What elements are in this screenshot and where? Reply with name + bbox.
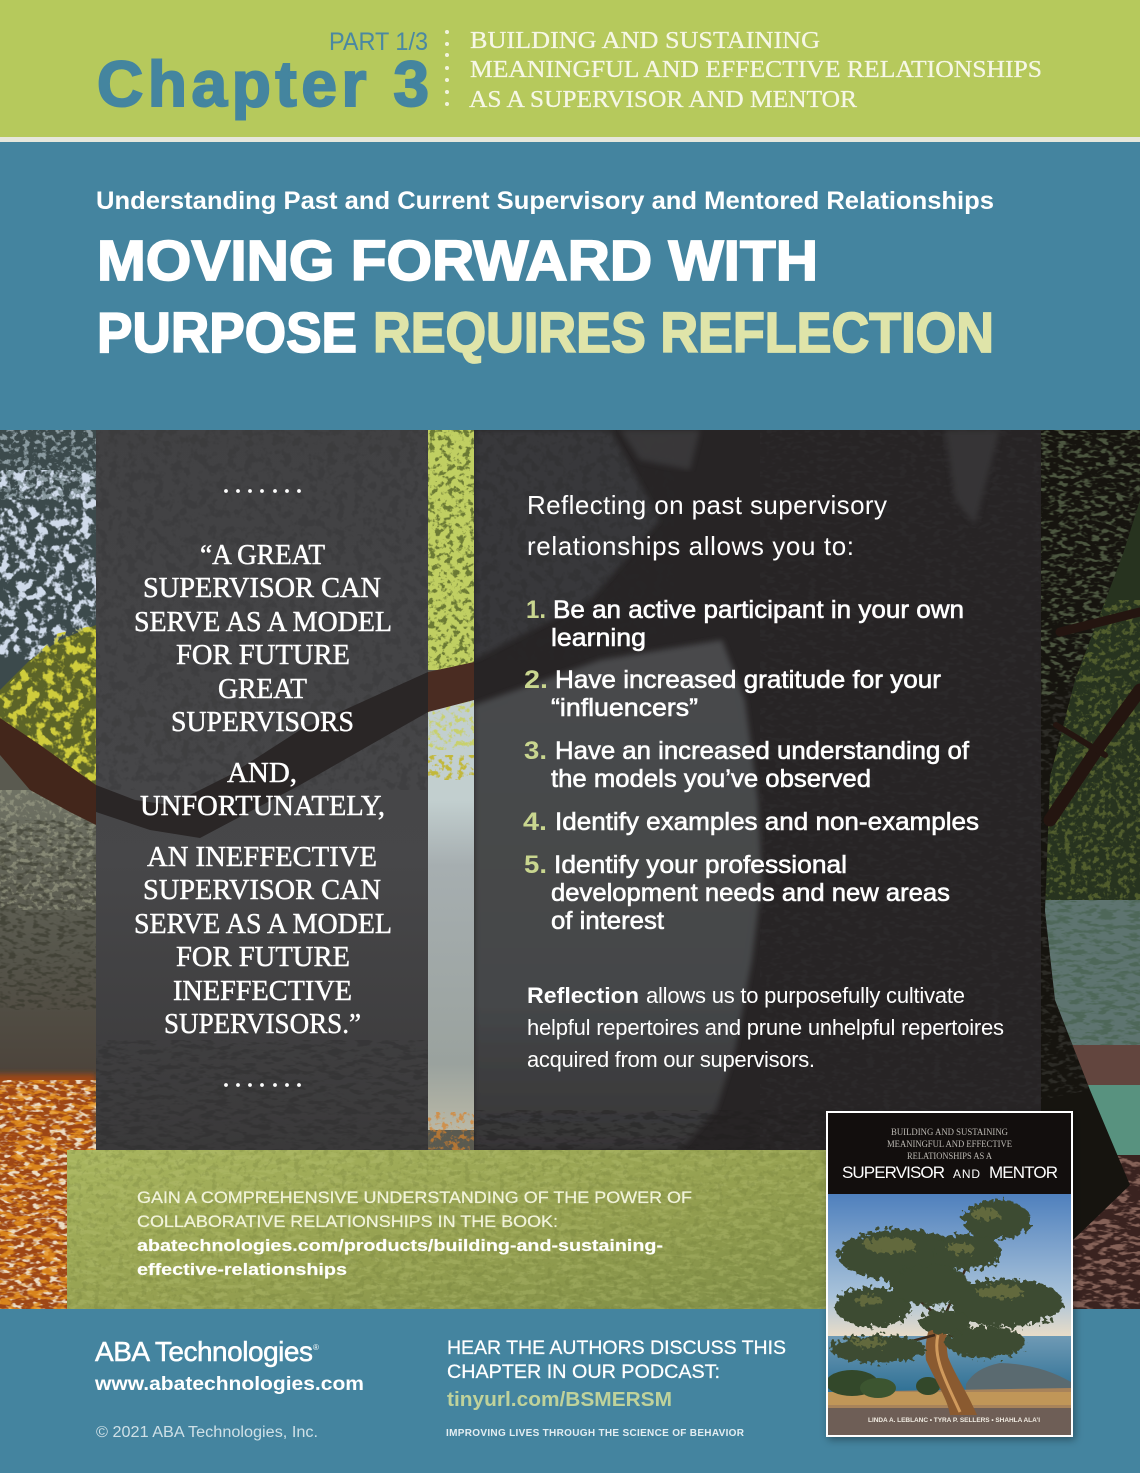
item 5: development needs and new areas <box>551 879 950 907</box>
main heading line 1: MOVING FORWARD WITH <box>97 229 818 293</box>
item 1: Be an active participant in your own <box>553 596 964 624</box>
item 3: 3. <box>524 737 547 765</box>
panel: title block <box>0 142 1140 430</box>
intro text <box>527 490 887 561</box>
right forest branches <box>1050 612 1140 820</box>
book title in header: AS A SUPERVISOR AND MENTOR <box>469 87 857 113</box>
quote text: SUPERVISORS.” <box>164 1009 361 1040</box>
book cover title: RELATIONSHIPS AS A <box>907 1152 992 1162</box>
panel: footer <box>0 1309 1140 1473</box>
item 5: of interest <box>551 907 664 935</box>
book cover photo: tree by the sea <box>826 1194 1071 1435</box>
tagline: IMPROVING LIVES THROUGH THE SCIENCE OF BEHAVIOR <box>446 1428 745 1439</box>
book cover title: BUILDING AND SUSTAINING <box>891 1128 1008 1138</box>
podcast callout <box>447 1338 786 1411</box>
quote text: AND, <box>227 758 297 789</box>
reflection paragraph <box>527 983 1004 1072</box>
quote text: UNFORTUNATELY, <box>140 791 385 822</box>
lower left misty forest <box>0 790 96 1100</box>
quote text: SUPERVISORS <box>171 707 354 738</box>
book cover title <box>842 1128 1058 1182</box>
book title in header: BUILDING AND SUSTAINING <box>470 28 820 54</box>
main heading line 2: PURPOSE <box>97 301 357 365</box>
item 2: Have increased gratitude for your <box>555 666 941 694</box>
item 2 <box>524 666 941 722</box>
reflection paragraph: allows us to purposefully cultivate <box>646 983 965 1008</box>
item 1 <box>526 596 964 652</box>
background photo: forest <box>0 430 1140 1314</box>
main branch through left strip <box>0 718 96 825</box>
subtitle: Understanding Past and Current Supervisory and Mentored Relationships <box>96 187 994 215</box>
callout text: effective-relationships <box>137 1260 347 1279</box>
callout text: abatechnologies.com/products/building-and-sustaining- <box>137 1236 663 1255</box>
item 4: 4. <box>523 808 547 836</box>
item 3: the models you’ve observed <box>551 765 871 793</box>
dotted vertical divider <box>445 30 449 106</box>
leaf-covered forest floor <box>0 1074 1140 1314</box>
item 3 <box>524 737 969 793</box>
quote text: AN INEFFECTIVE <box>147 842 377 873</box>
item 1: 1. <box>526 596 546 624</box>
callout text <box>137 1188 692 1279</box>
copyright: © 2021 ABA Technologies, Inc. <box>96 1424 318 1441</box>
logo: ABA Technologies: ABA Technologies <box>95 1336 313 1367</box>
item 5: Identify your professional <box>554 851 847 879</box>
item 1: learning <box>551 624 646 652</box>
podcast callout: CHAPTER IN OUR PODCAST: <box>447 1362 720 1383</box>
item 5: 5. <box>524 851 547 879</box>
callout text: COLLABORATIVE RELATIONSHIPS IN THE BOOK: <box>137 1212 558 1231</box>
book cover title: AND <box>953 1167 980 1181</box>
item 5 <box>524 851 950 935</box>
podcast callout: HEAR THE AUTHORS DISCUSS THIS <box>447 1338 786 1359</box>
quote text: “A GREAT <box>200 540 325 571</box>
top dotted ornament <box>224 489 301 493</box>
book cover authors: LINDA A. LEBLANC • TYRA P. SELLERS • SHAHLA ALA’I <box>868 1417 1040 1424</box>
branch through middle strip <box>428 662 474 712</box>
quote text: INEFFECTIVE <box>173 976 352 1007</box>
quote text: FOR FUTURE <box>176 640 350 671</box>
quote text: SERVE AS A MODEL <box>134 909 392 940</box>
main heading line 2: REQUIRES REFLECTION <box>373 301 994 365</box>
quote text: FOR FUTURE <box>176 942 350 973</box>
book title in header: MEANINGFUL AND EFFECTIVE RELATIONSHIPS <box>470 57 1042 83</box>
canopy strip between panels <box>428 430 474 1150</box>
quote text: SUPERVISOR CAN <box>143 573 381 604</box>
book title in header <box>469 28 1042 113</box>
part label: PART 1/3 <box>329 28 428 56</box>
intro text: Reflecting on past supervisory <box>527 490 887 520</box>
callout text: GAIN A COMPREHENSIVE UNDERSTANDING OF THE POWER OF <box>137 1188 692 1207</box>
podcast callout: tinyurl.com/BSMERSM <box>447 1389 672 1411</box>
large tree trunk at right edge <box>1041 430 1140 1240</box>
logo: ABA Technologies: ® <box>313 1343 319 1352</box>
numbered list <box>523 596 979 935</box>
website: www.abatechnologies.com <box>94 1374 364 1395</box>
chapter number heading: Chapter 3 <box>97 48 429 120</box>
panel: reflection list <box>474 430 1041 1150</box>
main heading line 2 <box>97 301 994 365</box>
item 2: “influencers” <box>551 694 698 722</box>
quote text: SERVE AS A MODEL <box>134 607 392 638</box>
reflection paragraph: acquired from our supervisors. <box>527 1047 815 1072</box>
sky and canopy, left <box>0 430 96 800</box>
bottom dotted ornament <box>224 1083 301 1087</box>
panel shadow: tree shapes behind list <box>474 430 1041 1150</box>
book cover title: SUPERVISOR <box>842 1163 945 1182</box>
item 3: Have an increased understanding of <box>555 737 969 765</box>
item 2: 2. <box>524 666 548 694</box>
reflection paragraph: helpful repertoires and prune unhelpful repertoires <box>527 1015 1004 1040</box>
book cover <box>826 1111 1073 1437</box>
quote text: GREAT <box>218 674 307 705</box>
item 4: Identify examples and non-examples <box>555 808 979 836</box>
panel shadow: branch and foliage behind quote <box>96 430 428 1150</box>
book cover title: MEANINGFUL AND EFFECTIVE <box>887 1140 1012 1150</box>
right forest <box>1045 500 1140 1085</box>
panel: header band <box>0 0 1140 142</box>
book cover title: MENTOR <box>989 1163 1058 1182</box>
intro text: relationships allows you to: <box>527 531 854 561</box>
panel: quote <box>96 430 428 1150</box>
panel: book callout band <box>67 1150 827 1309</box>
reflection paragraph: Reflection <box>527 983 639 1008</box>
quote text <box>134 540 392 1040</box>
quote text: SUPERVISOR CAN <box>143 875 381 906</box>
